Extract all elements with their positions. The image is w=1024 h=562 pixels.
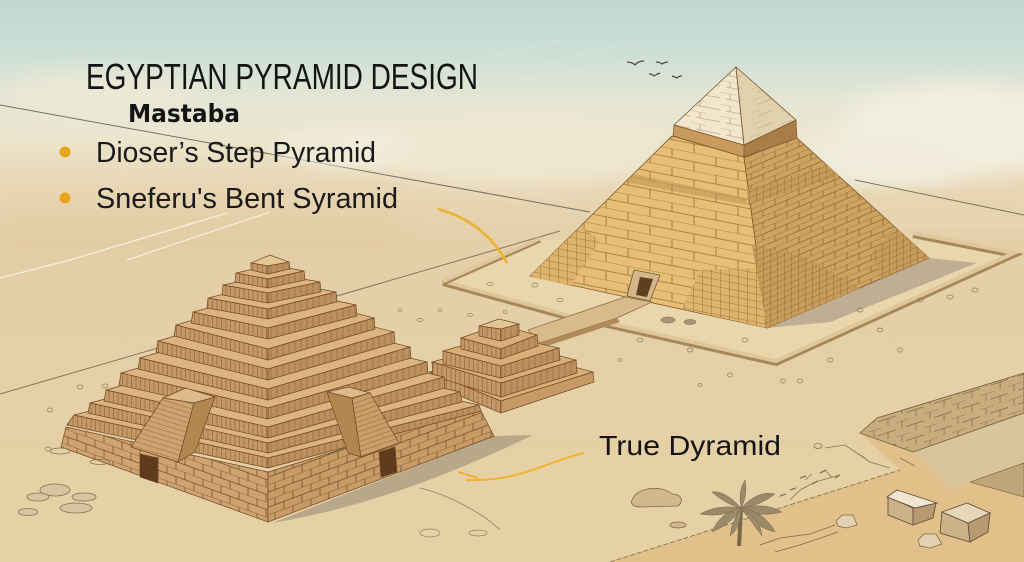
list item: Dioser's Step Pyramid: Dioser’s Step Pyramid [96,137,376,169]
rocks lower left [18,448,110,516]
yellow leader line to true pyramid [438,209,507,263]
excavated wall and pit [860,373,1024,497]
birds [627,61,682,78]
true pyramid right face [744,138,929,328]
mud-brick huts [887,490,990,542]
bullet list [60,137,398,215]
left hut [887,490,937,525]
small step pyramid [430,319,594,413]
bullet dot 2 [60,192,70,204]
Djoser step pyramid [61,255,494,522]
left doorway [140,454,158,483]
bullet dot 1 [60,146,70,158]
horizon and survey lines [0,40,1024,394]
enclosure wall around true pyramid [443,233,1017,366]
right ramp [327,387,399,457]
title: EGYPTIAN PYRAMID DESIGN [86,56,478,97]
ground arc [420,488,500,530]
true pyramid left face [530,136,767,328]
brick plinth [61,407,494,522]
yellow leader line to step pyramid [458,453,584,480]
casing band [673,120,797,157]
list item: Sneferu's Bent Syramid: Sneferu's Bent Syramid [96,183,398,215]
causeway [528,297,652,348]
true pyramid [530,67,977,328]
rubble along terrace edge [780,444,915,500]
right hut [940,503,990,542]
limestone capstone [674,67,796,145]
right doorway [379,447,397,477]
left ramp [131,388,215,462]
label: True Dyramid: True Dyramid [599,430,781,461]
label: Mastaba: Mastaba [128,99,240,128]
true pyramid shadow [767,258,977,328]
rocks near palm [631,488,942,552]
step pyramid shadow [272,435,533,523]
stepped tiers [67,255,481,468]
glow behind list text [270,128,410,168]
pebbles [45,282,978,537]
entrance doorway [627,270,660,301]
palm tree [700,480,782,546]
lower-right sand terrace [610,373,1024,562]
